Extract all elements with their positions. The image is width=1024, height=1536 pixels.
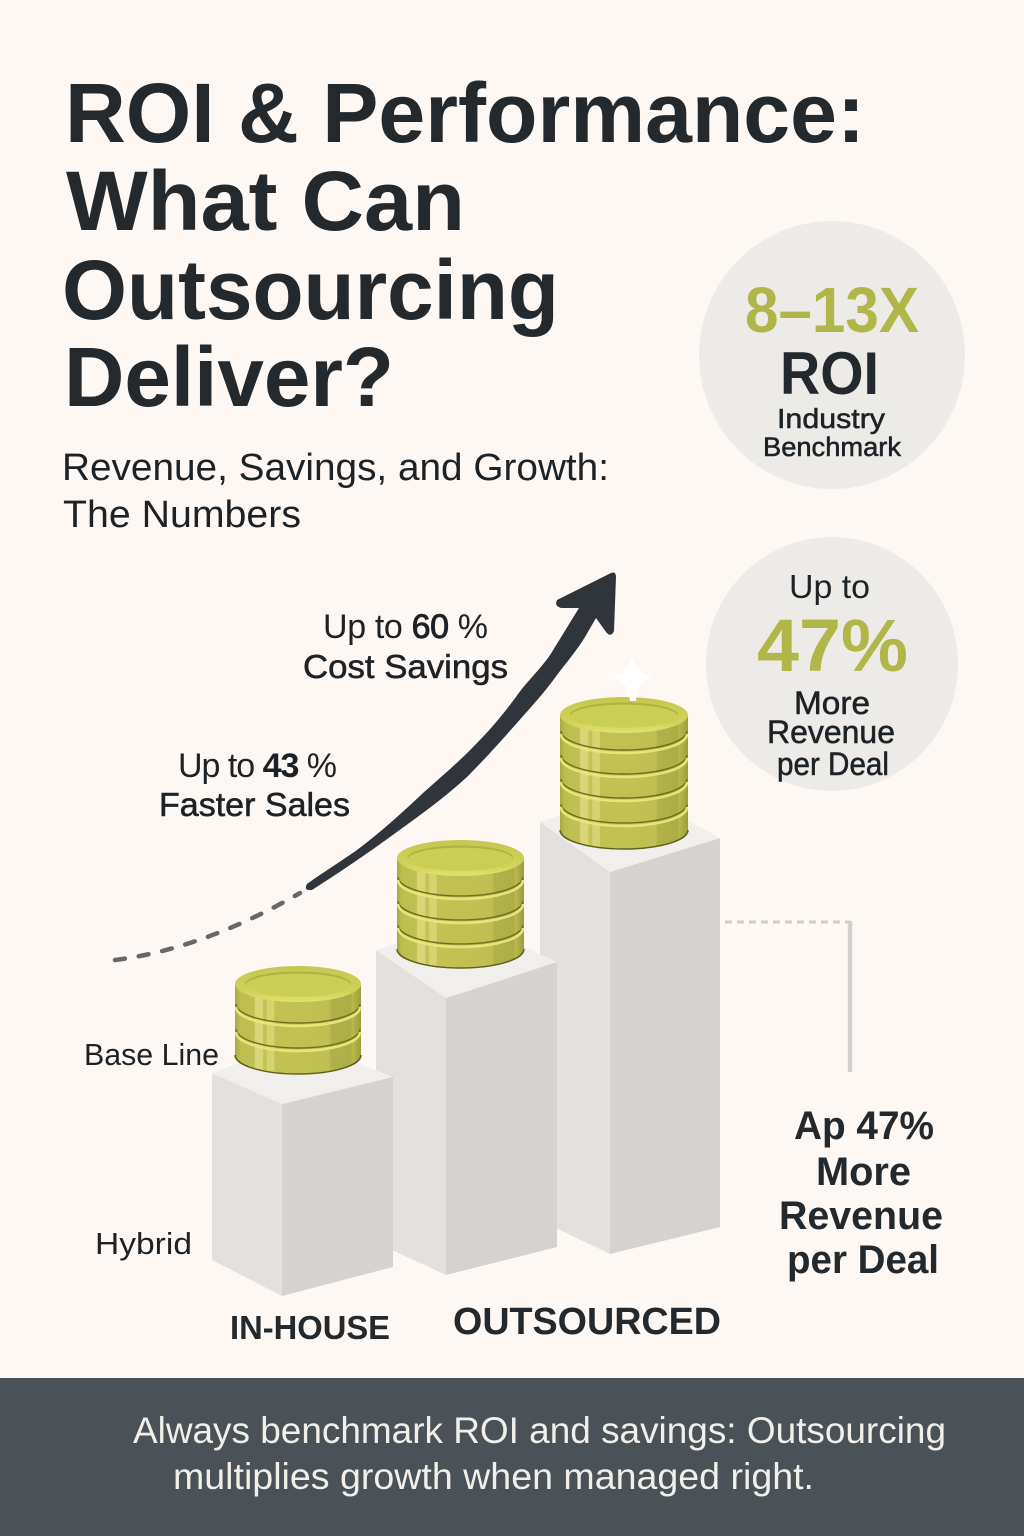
label: cost savings: Up to 60 % <box>323 608 488 646</box>
footer banner: multiplies growth when managed right. <box>173 1456 814 1497</box>
callout: 8-13X ROI: Benchmark <box>763 432 901 462</box>
callout: up to 47% more revenue: 47% <box>757 604 908 687</box>
callout: ap 47% more revenue per deal: More <box>816 1150 911 1194</box>
title: ROI & Performance: <box>65 66 865 160</box>
footer banner: Always benchmark ROI and savings: Outsourcing <box>133 1410 946 1451</box>
title <box>62 66 865 424</box>
label: cost savings <box>303 608 508 685</box>
callout: up to 47% more revenue: Up to <box>789 568 870 605</box>
title: Outsourcing <box>62 243 559 337</box>
callout: 8-13X ROI <box>699 221 965 489</box>
callout: up to 47% more revenue: per Deal <box>777 746 889 782</box>
callout: ap 47% more revenue per deal: Ap 47% <box>794 1104 934 1148</box>
callout: ap 47% more revenue per deal: Revenue <box>779 1194 943 1238</box>
callout: 8-13X ROI: Industry <box>777 403 885 434</box>
label: in-house: IN-HOUSE <box>230 1309 390 1346</box>
pillar: hybrid middle <box>376 920 557 1275</box>
label: hybrid: Hybrid <box>95 1226 192 1261</box>
subtitle <box>62 447 609 536</box>
callout: ap 47% more revenue per deal: per Deal <box>787 1238 939 1282</box>
label: faster sales: Faster Sales <box>159 786 350 823</box>
pillar: outsourced tall <box>540 790 720 1254</box>
subtitle: The Numbers <box>63 494 301 536</box>
coin stack: four coins <box>397 840 524 968</box>
callout: 8-13X ROI: ROI <box>780 340 879 407</box>
coin stack: five coins <box>560 697 688 849</box>
connector line <box>725 921 850 1072</box>
callout: up to 47% more revenue: Revenue <box>767 714 895 750</box>
growth arrow <box>115 572 616 960</box>
pillar: in-house short <box>212 1040 393 1296</box>
subtitle: Revenue, Savings, and Growth: <box>62 447 609 489</box>
label: base line: Base Line <box>84 1037 219 1072</box>
coin stack: three coins <box>235 966 361 1074</box>
callout: up to 47% more revenue <box>706 537 958 791</box>
callout: up to 47% more revenue: More <box>794 685 870 721</box>
callout: ap 47% more revenue per deal <box>779 1104 943 1282</box>
label: cost savings: Cost Savings <box>303 648 508 685</box>
callout: 8-13X ROI: 8–13X <box>745 274 919 346</box>
icon: sparkle <box>612 657 653 701</box>
label: outsourced: OUTSOURCED <box>453 1301 721 1343</box>
title: What Can <box>66 154 465 248</box>
title: Deliver? <box>64 330 394 424</box>
label: faster sales <box>159 747 350 823</box>
label: faster sales: Up to 43 % <box>178 747 337 785</box>
footer banner <box>0 1378 1024 1536</box>
